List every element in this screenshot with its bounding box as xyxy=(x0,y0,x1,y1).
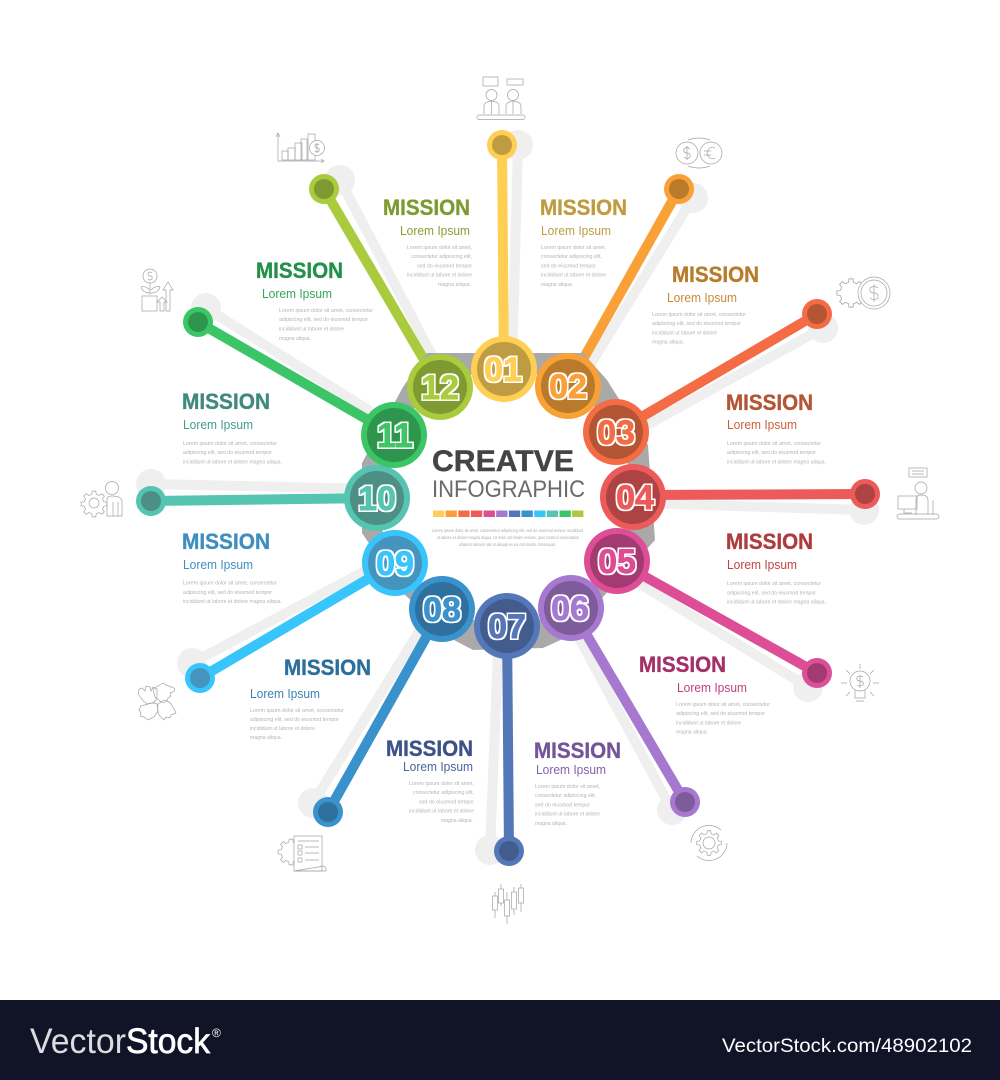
text block: purple mission: Lorem ipsum dolor sit amet, xyxy=(535,784,600,790)
badge 05: 05 xyxy=(598,543,636,581)
text block: olive mission: magna aliqua. xyxy=(438,282,471,288)
text block: green mission: magna aliqua. xyxy=(279,336,311,342)
text block: magenta mission: Lorem ipsum dolor sit amet, consectetur xyxy=(676,702,770,708)
grey hub ring xyxy=(362,353,655,650)
text block: magenta mission: Lorem Ipsum xyxy=(677,681,747,695)
center title xyxy=(432,445,585,503)
center description xyxy=(432,528,584,547)
text block: yellow mission: MISSION xyxy=(540,195,627,220)
text block: teal mission: incididunt ut labore et dolore magna aliqua. xyxy=(183,460,282,466)
text block: magenta mission: adipiscing elit, sed do eiusmod tempor xyxy=(676,711,765,717)
icon: gear and checklist document xyxy=(278,836,326,871)
badge 12: 12 xyxy=(421,369,459,407)
badge 06 xyxy=(538,575,604,641)
text block: green mission xyxy=(256,258,373,342)
text block: orange mission: Lorem Ipsum xyxy=(667,291,737,305)
icon: candlestick chart xyxy=(492,884,524,924)
text block: navy mission: consectetur adipiscing elit, xyxy=(413,790,474,796)
text block: olive mission: incididunt ut labore et dolore xyxy=(407,273,472,279)
text block: coral mission: Lorem Ipsum xyxy=(727,418,797,432)
badge 01 xyxy=(471,336,537,402)
spoke 07 xyxy=(475,626,524,866)
text block: orange mission: magna aliqua. xyxy=(652,340,684,346)
badge 03: 03 xyxy=(597,414,635,452)
icon: light bulb with dollar xyxy=(841,664,879,701)
text block: blue mission: MISSION xyxy=(284,655,371,680)
center description: ullamco laboris nisi ut aliquip ex ea commodo consequat. xyxy=(459,542,556,547)
text block: navy mission: incididunt ut labore et dolore xyxy=(409,808,474,814)
badge 06: 06 xyxy=(551,590,589,628)
text block: olive mission: consectetur adipiscing elit, xyxy=(411,254,472,260)
text block: sky mission: MISSION xyxy=(182,529,270,554)
spoke 08 xyxy=(298,604,442,827)
text block: olive mission: Lorem Ipsum xyxy=(400,224,470,238)
spoke 11 xyxy=(183,293,397,435)
text block: coral mission: MISSION xyxy=(726,390,813,415)
text block: magenta mission: incididunt ut labore et dolore xyxy=(676,720,741,726)
text block: green mission: Lorem Ipsum xyxy=(262,287,332,301)
text block: navy mission xyxy=(386,736,474,824)
spoke 05 xyxy=(614,561,832,702)
text block: yellow mission: incididunt ut labore et dolore xyxy=(541,273,606,279)
badge 04 xyxy=(600,464,666,530)
badge 10: 10 xyxy=(358,480,396,518)
footer image id: VectorStock.com/48902102 xyxy=(722,1036,972,1057)
spoke 10 xyxy=(136,469,377,516)
badge 09 xyxy=(362,530,428,596)
badge 01: 01 xyxy=(484,351,522,389)
text block: sky mission: incididunt ut labore et dolore magna aliqua. xyxy=(183,599,282,605)
badge 02 xyxy=(535,353,601,419)
badge 07 xyxy=(474,593,540,659)
text block: olive mission xyxy=(383,195,472,288)
text block: blue mission: Lorem Ipsum xyxy=(250,687,320,701)
icon: dollar and euro coins xyxy=(676,138,722,168)
text block: red mission: Lorem Ipsum xyxy=(727,558,797,572)
text block: purple mission: MISSION xyxy=(534,738,621,763)
text block: green mission: incididunt ut labore et dolore xyxy=(279,326,344,332)
text block: red mission xyxy=(726,529,826,606)
center description: ut labore et dolore magna aliqua. Ut enim ad minim veniam, quis nostrud exercitation xyxy=(437,535,580,540)
icon: bar chart with dollar coin xyxy=(276,133,324,163)
text block: purple mission: sed do eiusmod tempor xyxy=(535,802,590,808)
text block: teal mission: Lorem Ipsum xyxy=(183,418,253,432)
text block: green mission: adipiscing elit, sed do eiusmod tempor xyxy=(279,317,368,323)
text block: teal mission: adipiscing elit, sed do eiusmod tempor xyxy=(183,450,272,456)
text block: blue mission: magna aliqua. xyxy=(250,735,282,741)
text block: coral mission xyxy=(726,390,826,466)
badge 03 xyxy=(583,399,649,465)
spoke 04 xyxy=(633,479,880,525)
text block: sky mission: Lorem Ipsum xyxy=(183,558,253,572)
text block: olive mission: Lorem ipsum dolor sit amet, xyxy=(407,245,472,251)
text block: blue mission xyxy=(250,655,371,741)
text block: magenta mission xyxy=(639,652,770,736)
text block: yellow mission: sed do eiusmod tempor xyxy=(541,264,596,270)
spoke 06 xyxy=(565,608,700,825)
text block: green mission: MISSION xyxy=(256,258,343,283)
text block: orange mission: adipiscing elit, sed do eiusmod tempor xyxy=(652,321,741,327)
icon: four joined hands xyxy=(138,683,176,720)
center title: CREATVE xyxy=(432,445,574,478)
text block: yellow mission: consectetur adipiscing elit, xyxy=(541,254,602,260)
text block: orange mission xyxy=(652,262,759,346)
color strip xyxy=(433,510,583,517)
spoke 09 xyxy=(177,556,395,693)
text block: purple mission: magna aliqua. xyxy=(535,821,567,827)
text block: yellow mission: magna aliqua. xyxy=(541,282,573,288)
badge 11 xyxy=(361,402,427,468)
text block: orange mission: Lorem ipsum dolor sit amet, consectetur xyxy=(652,312,746,318)
text block: red mission: adipiscing elit, sed do eiusmod tempor xyxy=(727,590,816,596)
text block: red mission: MISSION xyxy=(726,529,813,554)
text block: purple mission: consectetur adipiscing elit, xyxy=(535,793,596,799)
footer logo: Stock xyxy=(126,1022,210,1061)
badge 11: 11 xyxy=(377,417,413,455)
icon: person and gear xyxy=(81,482,122,517)
text block: blue mission: Lorem ipsum dolor sit amet, consectetur xyxy=(250,708,344,714)
text block: orange mission: incididunt ut labore et dolore xyxy=(652,330,717,336)
text block: teal mission xyxy=(182,389,282,466)
text block: teal mission: Lorem ipsum dolor sit amet, consectetur xyxy=(183,441,277,447)
text block: red mission: Lorem ipsum dolor sit amet, consectetur xyxy=(727,581,821,587)
text block: navy mission: Lorem ipsum dolor sit amet, xyxy=(409,781,474,787)
text block: orange mission: MISSION xyxy=(672,262,759,287)
text block: yellow mission xyxy=(540,195,627,288)
badge 12 xyxy=(407,354,473,420)
text block: red mission: incididunt ut labore et dolore magna aliqua. xyxy=(727,600,826,606)
text block: blue mission: adipiscing elit, sed do eiusmod tempor xyxy=(250,717,339,723)
text block: sky mission: Lorem ipsum dolor sit amet, consectetur xyxy=(183,580,277,586)
footer logo: ® xyxy=(212,1026,221,1040)
text block: green mission: Lorem ipsum dolor sit amet, consectetur xyxy=(279,308,373,314)
text block: yellow mission: Lorem Ipsum xyxy=(541,224,611,238)
text block: navy mission: MISSION xyxy=(386,736,473,761)
badge 07: 07 xyxy=(488,608,526,646)
text block: purple mission: Lorem Ipsum xyxy=(536,763,606,777)
icon: two speakers at a desk xyxy=(477,77,525,120)
icon: gear and dollar coin xyxy=(837,277,890,309)
text block: olive mission: MISSION xyxy=(383,195,470,220)
spoke 01 xyxy=(487,130,533,369)
footer logo: Vector xyxy=(30,1022,126,1061)
footer bar xyxy=(0,1000,1000,1080)
spoke 12 xyxy=(309,165,446,387)
badge 08: 08 xyxy=(423,591,461,629)
badge 10 xyxy=(344,465,410,531)
text block: blue mission: incididunt ut labore et dolore xyxy=(250,726,315,732)
text block: purple mission: incididunt ut labore et dolore xyxy=(535,812,600,818)
text block: coral mission: incididunt ut labore et dolore magna aliqua. xyxy=(727,460,826,466)
badge 09: 09 xyxy=(376,545,414,583)
text block: navy mission: sed do eiusmod tempor xyxy=(419,800,474,806)
text block: purple mission xyxy=(534,738,621,827)
spoke 03 xyxy=(616,299,838,440)
text block: coral mission: Lorem ipsum dolor sit amet, consectetur xyxy=(727,441,821,447)
badge 05 xyxy=(584,528,650,594)
text block: yellow mission: Lorem ipsum dolor sit amet, xyxy=(541,245,606,251)
badge 02: 02 xyxy=(549,368,587,406)
center title: INFOGRAPHIC xyxy=(432,476,585,503)
text block: olive mission: sed do eiusmod tempor xyxy=(417,264,472,270)
icon: support agent at computer xyxy=(897,468,939,519)
badge 08 xyxy=(409,576,475,642)
spoke 02 xyxy=(568,174,708,391)
text block: teal mission: MISSION xyxy=(182,389,270,414)
text block: magenta mission: magna aliqua. xyxy=(676,730,708,736)
icon: gear with cycle arrows xyxy=(691,825,727,861)
center description: Lorem ipsum dolor sit amet, consectetur adipiscing elit, sed do eiusmod tempor incididunt xyxy=(432,528,584,533)
text block: sky mission xyxy=(182,529,282,605)
text block: sky mission: adipiscing elit, sed do eiusmod tempor xyxy=(183,590,272,596)
text block: magenta mission: MISSION xyxy=(639,652,726,677)
text block: navy mission: Lorem Ipsum xyxy=(403,760,473,774)
text block: coral mission: adipiscing elit, sed do eiusmod tempor xyxy=(727,450,816,456)
badge 04: 04 xyxy=(616,479,654,517)
text block: navy mission: magna aliqua. xyxy=(441,818,473,824)
icon: plant and growth arrows xyxy=(141,269,173,311)
